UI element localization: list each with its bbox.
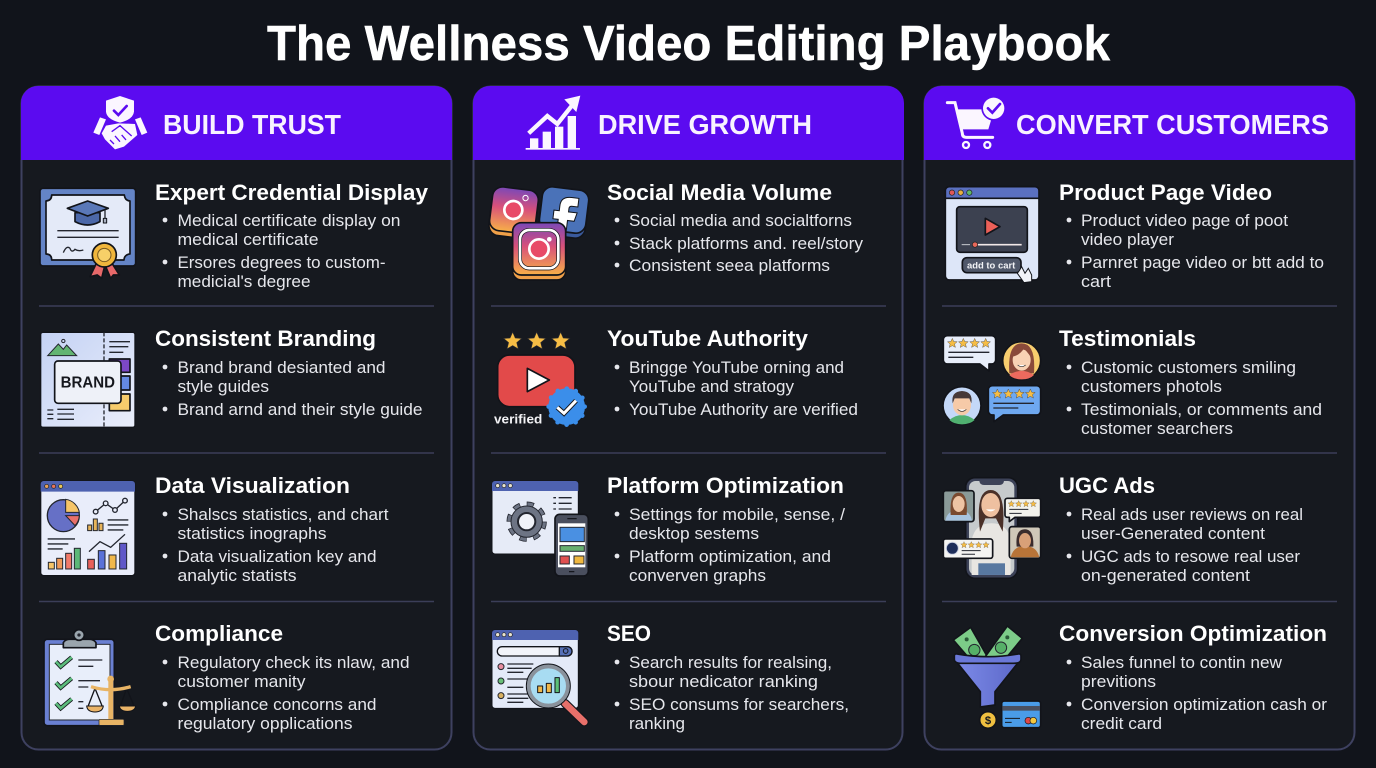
panel: build trust [21,86,452,750]
subheading: Expert Credential Display [155,180,428,205]
bullet list: on-generated content [1081,566,1250,585]
subheading: Product Page Video [1059,180,1272,205]
bullet list: Product video page of poot [1081,211,1288,230]
bullet list: previtions [1081,672,1156,691]
bullet list [1067,653,1327,733]
item: product page video [945,180,1324,291]
bullet list: Regulatory check its nlaw, and [178,653,410,672]
bullet list: Conversion optimization cash or [1081,695,1327,714]
bullet list [615,653,849,733]
item: seo [492,621,849,733]
bullet list: Customic customers smiling [1081,358,1296,377]
subheading: YouTube Authority [607,326,808,351]
icon: dashboard charts [41,481,135,576]
bullet list: Stack platforms and. reel/story [629,234,864,253]
bullet list: Testimonials, or comments and [1081,400,1322,419]
item: platform optimization [492,473,845,585]
icon: video player with add to cart [945,187,1039,283]
bullet list: Sales funnel to contin new [1081,653,1283,672]
bullet list: video player [1081,230,1174,249]
bullet list: UGC ads to resowe real user [1081,547,1300,566]
subheading: Social Media Volume [607,180,832,205]
bullet list: statistics inographs [178,524,326,543]
bullet list: Bringge YouTube orning and [629,358,844,377]
subheading: Conversion Optimization [1059,621,1327,646]
item: social media volume [488,180,864,280]
icon: video player with add to cart: add to cart [967,261,1015,271]
icon: shopping cart with check [947,96,1006,148]
bullet list: Medical certificate display on [178,211,400,230]
icon: phone with user content [943,478,1041,578]
bullet list [1067,505,1303,585]
item: compliance [44,621,410,733]
bullet list: medicial's degree [178,272,310,291]
bullet list [163,505,389,585]
bullet list: medical certificate [178,230,318,249]
bullet list: converven graphs [629,566,766,585]
subheading: Testimonials [1059,326,1196,351]
bullet list: Real ads user reviews on real [1081,505,1303,524]
bullet list: YouTube Authority are verified [629,400,858,419]
icon: verified play button [494,332,585,426]
bullet list: analytic statists [178,566,296,585]
bullet list: customer searchers [1081,419,1233,438]
icon: verified play button: verified [494,411,542,426]
subheading: Consistent Branding [155,326,376,351]
panel: convert customers [924,86,1355,750]
bullet list [163,358,422,419]
bullet list: customers photols [1081,377,1222,396]
icon: rising bar chart with arrow [526,96,580,150]
icon: stacked social app icons [488,186,590,280]
bullet list: Parnret page video or btt add to [1081,253,1324,272]
bullet list: SEO consums for searchers, [629,695,849,714]
bullet list: Brand arnd and their style guide [178,400,422,419]
bullet list: desktop sestems [629,524,759,543]
bullet list: user-Generated content [1081,524,1265,543]
bullet list: sbour nedicator ranking [629,672,818,691]
icon: settings window and phone [492,481,588,576]
bullet list [1067,211,1324,291]
item: data visualization [41,473,389,585]
bullet list: ranking [629,714,685,733]
heading: convert customers: CONVERT CUSTOMERS [1016,109,1329,140]
bullet list: Search results for realsing, [629,653,832,672]
item: youtube authority [494,326,858,426]
bullet list [615,505,845,585]
bullet list: Compliance concorns and [178,695,376,714]
subheading: SEO [607,621,651,646]
icon: clipboard and scales [44,630,136,726]
icon: search window with magnifier [492,630,584,722]
subheading: Data Visualization [155,473,350,498]
bullet list: Social media and socialtforns [629,211,852,230]
icon: shield and handshake [93,96,147,149]
bullet list: Data visualization key and [178,547,376,566]
icon: framed certificate [40,188,136,278]
bullet list [615,211,864,275]
bullet list: Consistent seea platforms [629,256,830,275]
bullet list: Brand brand desianted and [178,358,386,377]
bullet list: style guides [178,377,269,396]
bullet list: Shalscs statistics, and chart [178,505,389,524]
item: ugc ads [943,473,1303,585]
subheading: UGC Ads [1059,473,1155,498]
item: consistent branding [41,326,422,427]
icon: money funnel with card [953,626,1041,728]
heading: drive growth: DRIVE GROWTH [598,109,812,140]
icon: brand style guide: BRAND [61,375,115,392]
icon: money funnel with card: $ [985,715,992,727]
bullet list [1067,358,1322,438]
icon: customer reviews [943,336,1041,425]
bullet list [163,211,400,291]
subheading: Compliance [155,621,283,646]
bullet list: customer manity [178,672,306,691]
bullet list: YouTube and stratogy [629,377,794,396]
bullet list: cart [1081,272,1111,291]
heading: build trust: BUILD TRUST [163,109,341,140]
item: conversion optimization [953,621,1327,733]
bullet list [615,358,858,419]
bullet list: Settings for mobile, sense, / [629,505,845,524]
title: The Wellness Video Editing Playbook [267,17,1111,71]
panel: drive growth [473,86,904,750]
bullet list: regulatory opplications [178,714,352,733]
bullet list [163,653,410,733]
bullet list: credit card [1081,714,1162,733]
icon: brand style guide [41,332,135,427]
item: testimonials [943,326,1322,438]
bullet list: Platform optimization, and [629,547,831,566]
item: expert credential display [40,180,428,291]
bullet list: Ersores degrees to custom- [178,253,386,272]
subheading: Platform Optimization [607,473,844,498]
